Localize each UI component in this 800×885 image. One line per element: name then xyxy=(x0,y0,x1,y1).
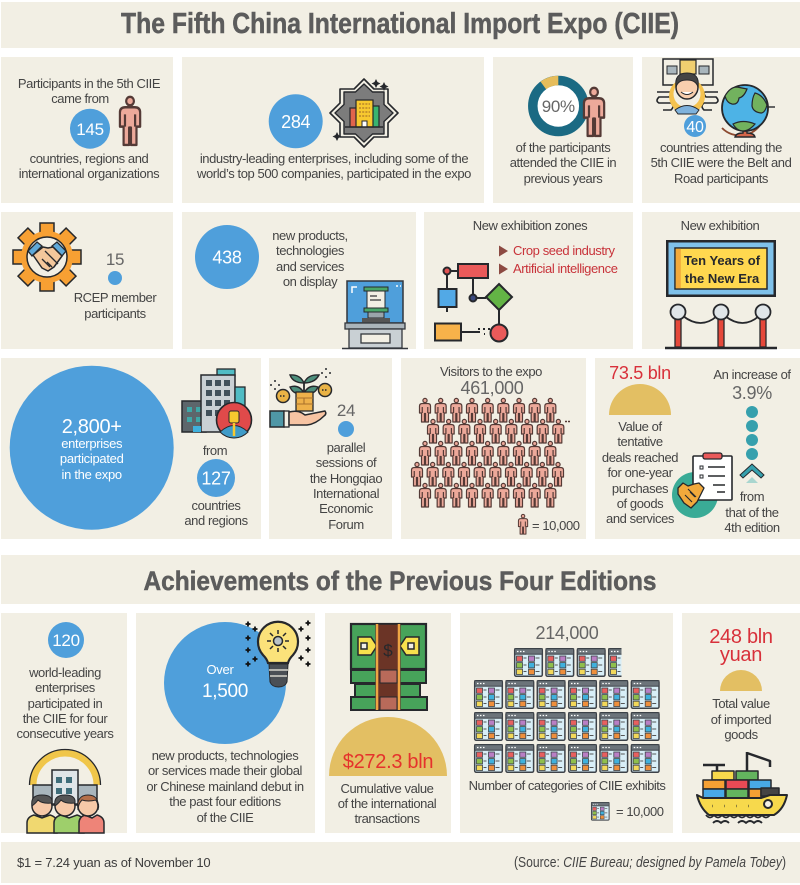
panel: 90 percent xyxy=(493,57,633,203)
circle: 284 xyxy=(269,94,323,148)
circle: 40 xyxy=(684,115,706,137)
icon: person xyxy=(584,88,604,136)
text: RCEP: participants xyxy=(84,306,147,321)
panel: 1,500 products xyxy=(136,613,315,833)
number: 248 bln yuan: 248 bln xyxy=(709,626,773,648)
text: products debut: new products, technologies xyxy=(152,748,299,763)
text: categories: Number of categories of CIIE exhibits xyxy=(469,778,666,793)
number: 461,000: 461,000 xyxy=(461,378,524,398)
text: from: from xyxy=(203,443,227,458)
circle: 145: 145 xyxy=(76,120,104,139)
text: deals: tentative xyxy=(617,434,663,449)
section band xyxy=(1,555,800,604)
text: parallel sessions: parallel xyxy=(327,440,366,455)
panel: imported goods xyxy=(682,613,800,833)
half circle: transactions xyxy=(329,717,447,776)
text: products debut: the past four editions xyxy=(169,794,282,809)
text: deals: and services xyxy=(606,511,675,526)
text: imported goods: goods xyxy=(724,727,759,742)
number: 24: 24 xyxy=(337,401,355,420)
icon: star badge with buildings xyxy=(330,79,398,147)
list: zones xyxy=(499,243,618,276)
text: from 4th edition xyxy=(724,489,780,535)
number: 3.9%: 3.9% xyxy=(732,383,772,403)
text: countries xyxy=(19,151,160,181)
text: parallel sessions: Economic xyxy=(319,501,374,516)
text: belt and road: 5th CIIE were the Belt and xyxy=(651,155,792,170)
text: parallel sessions: International xyxy=(313,486,380,501)
text: products debut: of the CIIE xyxy=(197,810,254,825)
number: 214,000: 214,000 xyxy=(536,623,599,643)
text: cumulative: transactions xyxy=(354,811,420,826)
text: RCEP xyxy=(74,290,157,321)
text: parallel sessions: Forum xyxy=(328,517,364,532)
heading: zones: New exhibition zones xyxy=(473,218,588,233)
donut chart: 90% xyxy=(533,80,584,132)
number: 248 bln yuan: yuan xyxy=(720,644,762,666)
text: countries and regions xyxy=(184,498,249,528)
circle: 438 xyxy=(195,225,259,289)
text: participants intro: came from xyxy=(51,91,109,106)
text: from 4th edition: that of the xyxy=(725,505,779,520)
text: exchange rate: $1 = 7.24 yuan as of November 10 xyxy=(17,855,210,870)
panel: new exhibition zones xyxy=(424,212,633,349)
circle: over 1,500: Over xyxy=(207,662,234,677)
circle: over 1,500 xyxy=(164,622,286,744)
icon: gear handshake xyxy=(13,223,81,291)
text: belt and road xyxy=(651,140,792,186)
panel: 120 enterprises xyxy=(1,613,127,833)
text: countries: countries, regions and xyxy=(30,151,149,166)
heading: new exhibition: New exhibition xyxy=(681,218,760,233)
title: The Fifth China International Import Expo (CIIE) xyxy=(121,8,679,40)
panel: new exhibition xyxy=(642,212,800,349)
legend: person xyxy=(518,514,580,534)
text: attended xyxy=(510,140,616,186)
text: deals xyxy=(602,419,678,526)
number: 15 xyxy=(106,250,124,285)
circle: 145 xyxy=(70,109,110,149)
text: world-leading: world-leading xyxy=(28,665,101,680)
circle: 2,800+: 2,800+ xyxy=(62,416,122,438)
text: cumulative xyxy=(338,781,437,826)
circle: 2,800+: participated xyxy=(60,451,124,466)
text: world-leading: participated in xyxy=(28,696,103,711)
heading: visitors: Visitors to the expo xyxy=(440,364,542,379)
icon: framed sign: the New Era xyxy=(685,271,760,286)
text: countries: international organizations xyxy=(19,166,160,181)
icon: money stacks xyxy=(351,624,427,710)
panel: parallel sessions xyxy=(269,358,392,539)
half circle: deals xyxy=(609,384,671,415)
text: countries and regions: and regions xyxy=(184,513,249,528)
text: deals: deals reached xyxy=(602,450,678,465)
text: countries and regions: countries xyxy=(192,498,241,513)
dots and arrow xyxy=(740,406,764,483)
text: enterprises: world’s top 500 companies, participated in the expo xyxy=(196,166,471,181)
icon: hand with plant and coins xyxy=(270,368,332,427)
icon: framed sign: Ten Years of xyxy=(684,253,761,268)
icon: clipboard and handshake xyxy=(672,453,732,518)
text: products debut: or Chinese mainland debut in xyxy=(146,779,304,794)
icon: display machine xyxy=(342,281,408,348)
circle: 438: 438 xyxy=(212,248,242,268)
panel: 438 products xyxy=(182,212,416,349)
icon: person xyxy=(120,97,140,145)
icon: money stacks: $ xyxy=(383,641,393,660)
text: deals: of goods xyxy=(617,496,664,511)
text: world-leading: consecutive years xyxy=(17,726,114,741)
pictogram: visitors xyxy=(412,398,570,507)
panel: 2,800+ enterprises xyxy=(1,358,261,539)
legend: person: = 10,000 xyxy=(532,518,580,533)
text: parallel sessions xyxy=(310,440,382,532)
icon: cargo ship xyxy=(697,752,787,823)
text: parallel sessions: sessions of xyxy=(316,455,377,470)
section heading: Achievements of the Previous Four Editions xyxy=(144,566,656,596)
text: world-leading: enterprises xyxy=(35,680,96,695)
icon: flowchart xyxy=(435,264,512,342)
circle: 2,800+: enterprises xyxy=(61,436,123,451)
text: deals: Value of xyxy=(618,419,662,434)
text: deals: for one-year xyxy=(607,465,674,480)
list: zones: Artificial intelligence xyxy=(513,261,618,276)
icon: rope barriers xyxy=(665,304,777,348)
text: attended: previous years xyxy=(524,171,603,186)
text: cumulative: Cumulative value xyxy=(340,781,434,796)
text: products debut: or services made their global xyxy=(148,763,303,778)
footer band xyxy=(1,842,800,883)
circle: over 1,500: 1,500 xyxy=(202,681,248,702)
icon: buildings and people xyxy=(182,369,252,438)
number: 24 xyxy=(337,401,355,437)
text: products debut xyxy=(146,748,304,825)
text: imported goods xyxy=(711,696,771,742)
panel: transactions xyxy=(325,613,451,833)
text: imported goods: Total value xyxy=(712,696,770,711)
panel: RCEP xyxy=(1,212,173,349)
number: $272.3 bln: $272.3 bln xyxy=(343,751,433,773)
number: 15: 15 xyxy=(106,250,124,269)
text: parallel sessions: the Hongqiao xyxy=(310,471,382,486)
circle: 2,800+: in the expo xyxy=(62,467,122,482)
legend: window xyxy=(591,802,664,820)
circle: 127 xyxy=(197,459,235,497)
text: belt and road: countries attending the xyxy=(660,140,782,155)
number: 73.5 bln: 73.5 bln xyxy=(609,363,671,383)
circle: 40: 40 xyxy=(686,119,704,136)
text: increase: An increase of xyxy=(713,367,791,382)
text: belt and road: Road participants xyxy=(674,171,769,186)
text: products: and services xyxy=(276,259,345,274)
circle: 120 xyxy=(48,622,84,658)
panel: 284 enterprises xyxy=(182,57,484,203)
legend: window: = 10,000 xyxy=(616,804,664,819)
panel: belt and road xyxy=(642,57,800,203)
number: 248 bln yuan xyxy=(709,626,773,666)
icon: person with building and gear xyxy=(657,59,718,114)
text: attended: of the participants xyxy=(516,140,611,155)
circle: 127: 127 xyxy=(201,468,231,488)
circle: 120: 120 xyxy=(52,631,80,650)
text: from 4th edition: 4th edition xyxy=(724,520,780,535)
donut chart: 90%: 90% xyxy=(542,97,575,116)
text: imported goods: of imported xyxy=(711,712,771,727)
text: cumulative: of the international xyxy=(338,796,437,811)
text: RCEP: RCEP member xyxy=(74,290,157,305)
text: products: on display xyxy=(283,274,338,289)
text: products: new products, xyxy=(272,228,348,243)
text: from 4th edition: from xyxy=(740,489,764,504)
text: enterprises xyxy=(196,151,471,181)
text: enterprises: industry-leading enterprises, including some of the xyxy=(200,151,468,166)
text: products xyxy=(272,228,348,289)
half circle: goods xyxy=(720,670,762,691)
text: deals: purchases xyxy=(612,481,669,496)
text: world-leading: the CIIE for four xyxy=(23,711,108,726)
pictogram: exhibit windows xyxy=(475,649,659,772)
text: world-leading xyxy=(17,665,114,741)
panel: participants origin xyxy=(1,57,173,203)
panel: visitors xyxy=(401,358,586,539)
title band xyxy=(1,2,800,48)
circle: 284: 284 xyxy=(281,112,311,132)
text: participants intro xyxy=(18,76,161,106)
text: products: technologies xyxy=(276,243,345,258)
list: zones: Crop seed industry xyxy=(513,243,615,258)
icon: framed sign xyxy=(666,240,776,297)
panel: exhibits xyxy=(460,613,673,833)
panel: deals and increase xyxy=(595,358,800,539)
icon: globe xyxy=(722,85,775,137)
icon: light bulb xyxy=(246,620,310,687)
icon: people with building and gear xyxy=(27,750,104,833)
text: attended: attended the CIIE in xyxy=(510,155,616,170)
text: participants intro: Participants in the 5th CIIE xyxy=(18,76,161,91)
circle: 2,800+ xyxy=(10,366,174,530)
